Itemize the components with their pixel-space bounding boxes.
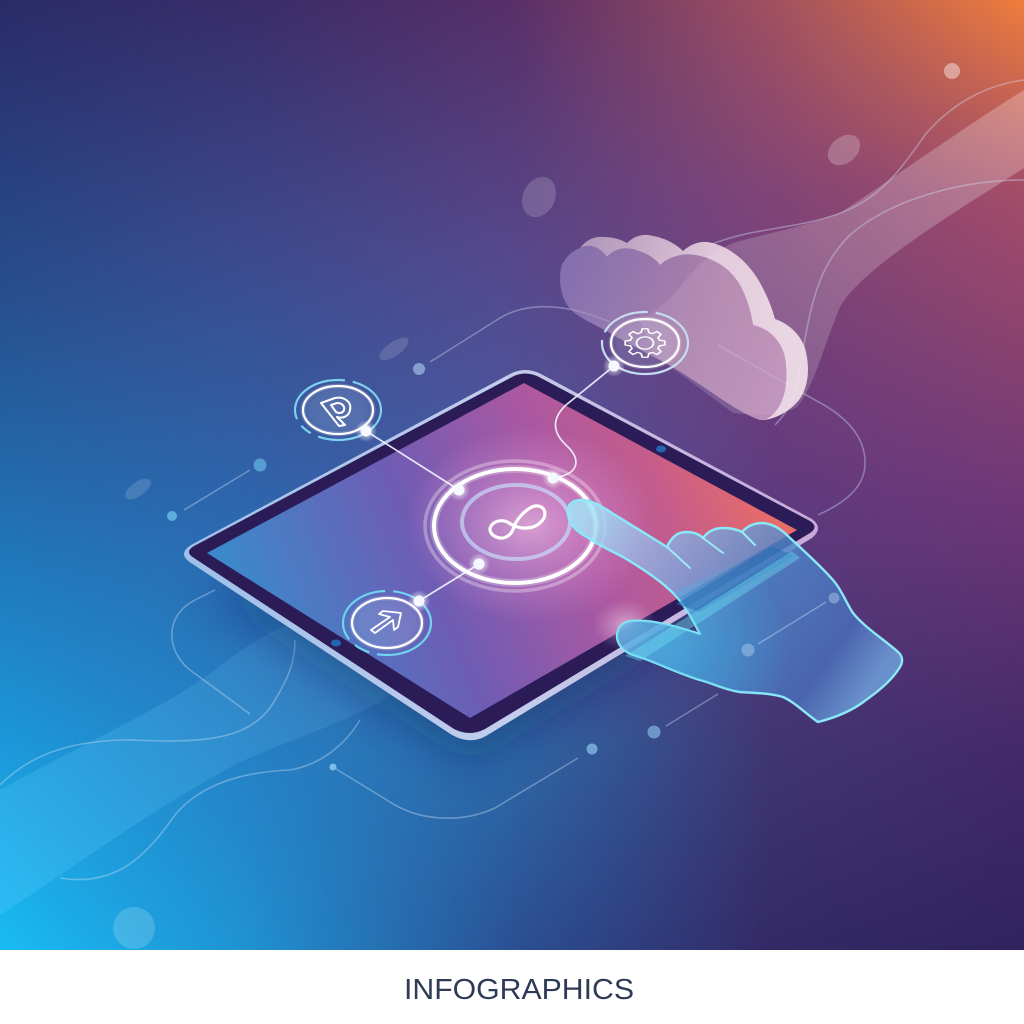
connector lines to icons — [366, 366, 614, 601]
hand: tablet edge seen through palm — [625, 551, 800, 661]
tablet: side edge — [184, 370, 818, 740]
screen glows — [405, 427, 657, 651]
icon badge: arrow — [343, 591, 431, 655]
connector node dots — [355, 355, 625, 612]
tablet: camera dots — [331, 446, 666, 646]
cloud: extruded side — [580, 235, 808, 420]
cloud: front face — [560, 246, 786, 420]
tablet — [184, 370, 818, 740]
icon badge: gear — [602, 312, 688, 374]
central hub: infinity — [425, 461, 605, 591]
translucent hand pointing at hub — [568, 500, 902, 722]
tablet drop shadow — [200, 560, 780, 765]
hand: inner dots and line — [742, 592, 840, 656]
flowing connector lines — [0, 80, 1024, 880]
icon badge: P — [295, 380, 381, 440]
tablet: screen — [207, 383, 797, 718]
icon: infinity symbol — [490, 506, 545, 538]
light beam: lower left — [0, 620, 395, 915]
hand: thumb and palm tint — [617, 537, 853, 722]
hand: bezel seen through palm — [676, 546, 794, 612]
hand: finger creases — [667, 532, 755, 568]
decorative floating dots and capsules — [113, 63, 960, 949]
title: INFOGRAPHICS — [404, 974, 634, 1006]
tablet: bezel — [189, 374, 814, 733]
cloud — [560, 235, 808, 420]
light beam: upper right — [640, 90, 1024, 415]
